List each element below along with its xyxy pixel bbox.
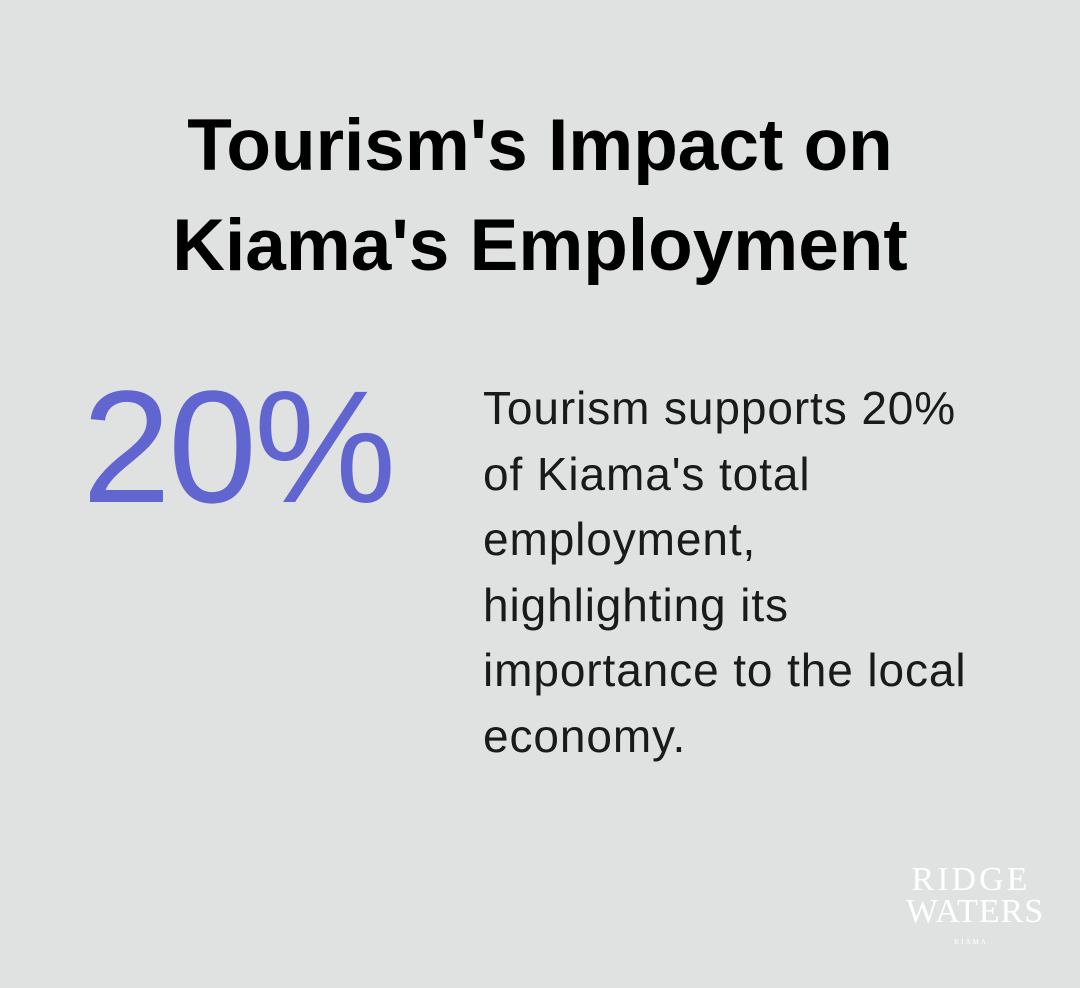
logo	[906, 861, 1044, 946]
description text: importance to the local	[483, 644, 967, 696]
logo: WATERS	[906, 893, 1044, 930]
description text: economy.	[483, 710, 686, 762]
description text: highlighting its	[483, 578, 789, 630]
title	[172, 105, 908, 286]
logo: KIAMA	[954, 938, 988, 946]
description text: Tourism supports 20%	[483, 382, 956, 434]
description text	[483, 382, 967, 762]
big stat: 20%	[82, 357, 393, 536]
title: Kiama's Employment	[172, 205, 908, 286]
logo: RIDGE	[912, 861, 1030, 898]
description text: of Kiama's total	[483, 448, 810, 500]
title: Tourism's Impact on	[187, 105, 893, 186]
description text: employment,	[483, 513, 756, 565]
